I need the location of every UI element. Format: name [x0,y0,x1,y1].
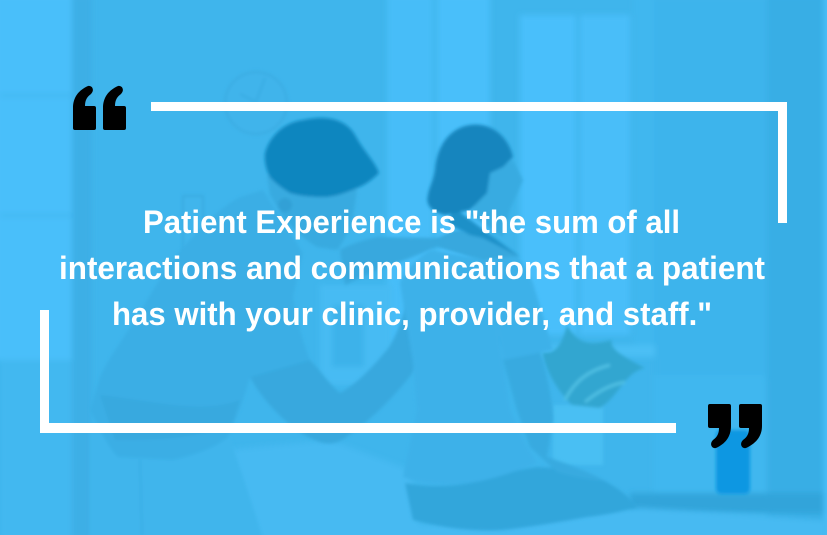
man: ear [278,198,292,212]
quote text: has with your clinic, provider, and staff." [112,296,712,332]
man: trousers [90,425,262,535]
wall clock [225,72,287,134]
woman: arm [503,350,605,481]
man [90,118,518,535]
shelf behind the patient [320,285,392,385]
man: hair [265,118,379,197]
bed [228,440,827,535]
woman [400,125,637,530]
man: hand on shoulder [437,232,518,260]
woman: shirt [400,250,553,484]
blue cylinder [716,430,750,494]
quote text: interactions and communications that a patient [59,250,765,286]
plant [542,325,645,465]
icon: closing quotation mark [708,404,762,448]
quote text: Patient Experience is "the sum of all [143,204,680,240]
wall picture frame [183,196,203,256]
woman: hair [427,125,513,215]
man: shirt [90,190,310,460]
man: forearm [250,278,442,444]
woman: legs [405,467,637,530]
quote text [59,204,765,332]
icon: opening quotation mark [73,86,126,130]
bottom-left bracket [40,310,676,433]
man: upper arm reaching to shoulder [340,231,518,285]
man: neck and face [267,175,357,250]
woman: neck and face [470,160,523,237]
woman: collar shadow [448,207,520,257]
top-right bracket [151,102,787,223]
